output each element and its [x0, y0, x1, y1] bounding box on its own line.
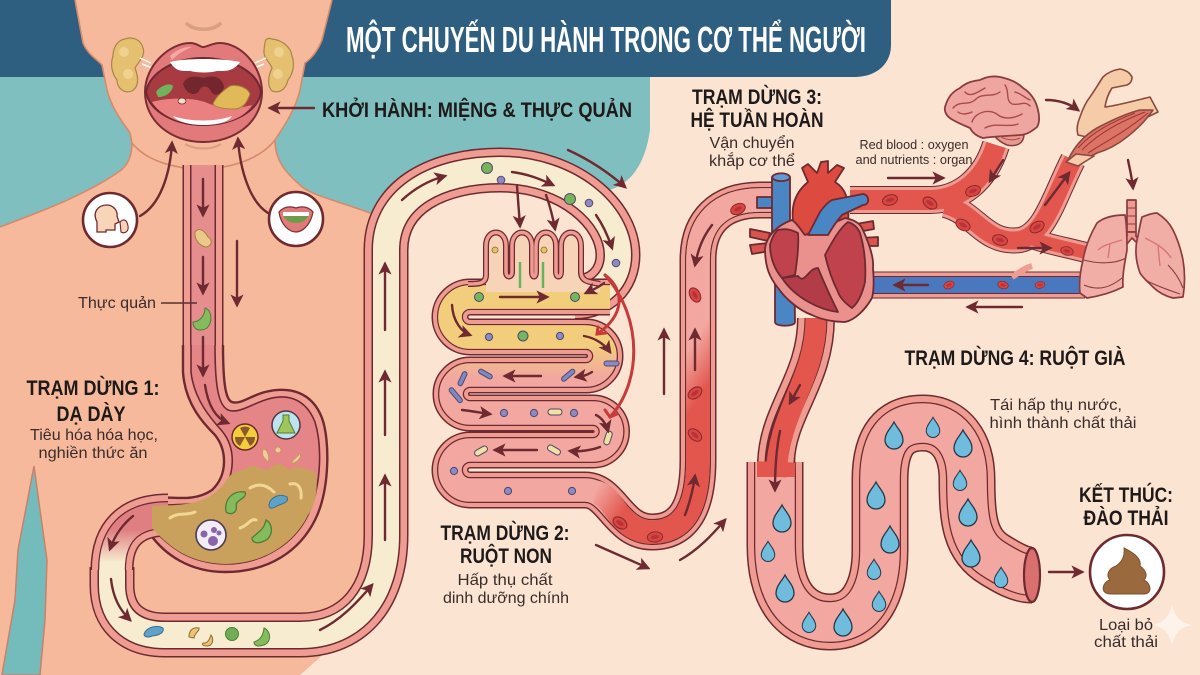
label: stop 1: nghiền thức ăn	[38, 445, 148, 462]
description: waste	[1094, 617, 1158, 651]
icon: enzyme molecule	[196, 520, 226, 550]
label: stop 1: TRẠM DỪNG 1:	[26, 376, 160, 400]
esophagus	[202, 165, 204, 360]
arrow to waste	[1049, 571, 1082, 573]
description: colon	[990, 397, 1136, 432]
coil contents	[448, 292, 619, 495]
label: stop 3	[690, 85, 824, 170]
label: stop 1	[26, 376, 160, 462]
esophagus and stomach arrows	[110, 179, 237, 549]
icon: smelling food	[83, 193, 137, 247]
label: end: ĐÀO THẢI	[1084, 507, 1168, 530]
esophagus leader	[161, 302, 197, 304]
icon: waste	[1090, 535, 1164, 609]
blue vein to heart	[873, 266, 1085, 285]
colon outlet	[1024, 548, 1040, 602]
label: stop 3: khắp cơ thể	[709, 151, 795, 170]
villi	[468, 232, 600, 292]
body silhouette	[0, 0, 386, 675]
stomach acid bubbles	[262, 447, 301, 464]
coil arrows	[452, 283, 610, 451]
label: end: KẾT THÚC:	[1079, 483, 1173, 507]
arrow on vein	[895, 284, 928, 286]
stomach	[150, 345, 327, 572]
duodenum contents	[144, 626, 270, 646]
label: stop 2: dinh dưỡng chính	[443, 590, 569, 607]
small intestine duct walls	[112, 170, 618, 635]
large intestine	[775, 423, 1032, 622]
cells on vein	[943, 280, 1045, 290]
label: stop 1: Tiêu hóa hóa học,	[30, 427, 158, 444]
heart	[750, 161, 878, 326]
stomach chyme	[152, 464, 317, 564]
label: stop 3: Vận chuyển	[710, 134, 794, 152]
vessel arrows	[775, 385, 800, 490]
arrows beside vessel	[596, 225, 725, 568]
arm gap	[2, 466, 47, 675]
icon: flask	[272, 411, 300, 439]
nutrient shortcut arrows	[597, 275, 634, 417]
chin crease	[185, 144, 221, 148]
pylorus	[112, 515, 168, 570]
arrow under vein	[968, 306, 1022, 308]
label: end	[1079, 483, 1173, 530]
icon: hazard acid	[232, 424, 258, 450]
note: red blood: and nutrients : organ	[856, 152, 972, 167]
description: waste: chất thải	[1094, 634, 1158, 651]
arm muscle	[1066, 69, 1158, 166]
description: waste: Loại bỏ	[1099, 617, 1153, 634]
mouth	[145, 43, 262, 142]
nose	[187, 24, 220, 29]
description: colon: Tái hấp thụ nước,	[990, 397, 1122, 414]
stomach food: green pieces	[226, 492, 271, 543]
duodenum arrows	[111, 150, 625, 630]
intestine coil and vessel	[450, 200, 790, 532]
water drops	[761, 417, 1008, 636]
label: stop 2: Hấp thụ chất	[458, 572, 553, 589]
banner	[0, 0, 891, 77]
large intestine red inlet	[757, 440, 796, 477]
label: departure: KHỞI HÀNH: MIỆNG & THỰC QUẢN	[322, 98, 632, 122]
note: red blood	[856, 137, 972, 167]
esophagus food	[195, 229, 211, 247]
salivary ducts	[140, 58, 266, 68]
label: stop 2: TRẠM DỪNG 2:	[440, 521, 570, 545]
label: stop 2: RUỘT NON	[460, 544, 552, 568]
salivary gland right	[264, 38, 293, 92]
note: red blood: Red blood : oxygen	[860, 137, 968, 152]
stomach food: blue piece	[269, 495, 288, 508]
esophagus label: Thực quản	[78, 295, 156, 312]
red blood cells: portal vessel	[611, 201, 747, 543]
cells on arteries	[881, 184, 1074, 257]
salivary gland left	[112, 38, 144, 92]
brain	[945, 76, 1039, 146]
icon: chewing mouth	[269, 192, 323, 246]
arrow: chew to mouth	[238, 139, 268, 213]
teal backdrop	[0, 60, 650, 300]
lungs	[1080, 200, 1184, 298]
label: stop 3: TRẠM DỪNG 3:	[692, 85, 822, 109]
artery arrows	[888, 100, 1133, 248]
face outline	[0, 0, 370, 227]
description: colon: hình thành chất thải	[990, 415, 1136, 432]
arteries to organs	[850, 145, 1095, 255]
title: MỘT CHUYẾN DU HÀNH TRONG CƠ THỂ NGƯỜI	[346, 18, 866, 60]
label: stop 2	[440, 521, 570, 607]
arrow: smell to mouth	[140, 143, 172, 216]
label: stop 4: TRẠM DỪNG 4: RUỘT GIÀ	[904, 346, 1126, 370]
sparkle	[1152, 604, 1192, 646]
label: stop 3: HỆ TUẦN HOÀN	[690, 108, 824, 132]
vessel below heart	[776, 318, 816, 477]
nutrients in arch	[482, 162, 620, 267]
label: stop 1: DẠ DÀY	[56, 403, 126, 426]
arrow: start to mouth	[270, 107, 314, 109]
